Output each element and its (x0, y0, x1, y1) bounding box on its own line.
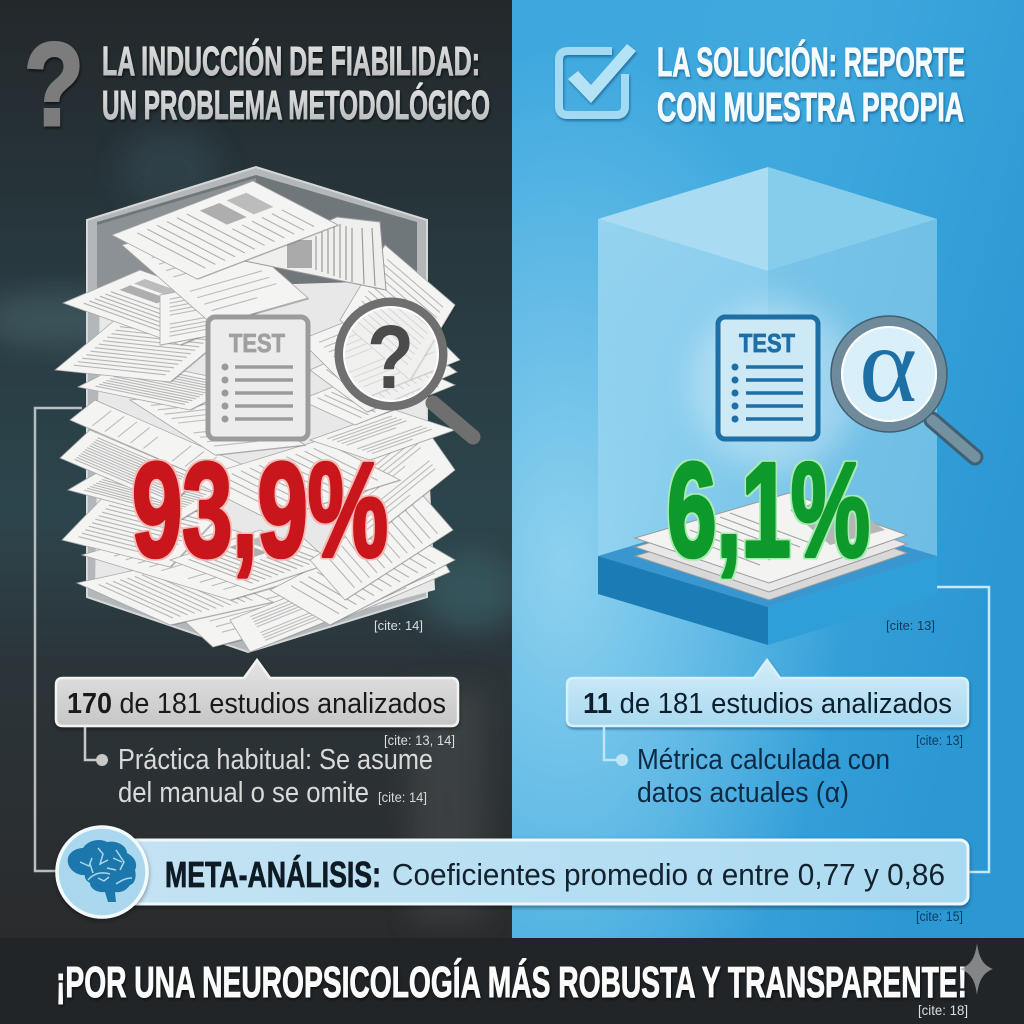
icon: magnifier with question mark (339, 302, 473, 437)
icon: magnifier with alpha: α (859, 306, 917, 425)
text: calculated metric: Métrica calculada con (637, 744, 890, 776)
heading: left problem header (24, 19, 490, 151)
cite: left stat: [cite: 14] (374, 618, 423, 633)
blue base (598, 505, 937, 645)
illustration: overflowing box of papers (55, 167, 473, 652)
cite: right stat: [cite: 13] (886, 618, 935, 633)
cite: left callout: [cite: 13, 14] (384, 732, 455, 748)
stat: 6,1%: 6,1% (667, 436, 870, 585)
title: left (102, 38, 490, 128)
text: calculated metric: datos actuales (α) (637, 777, 849, 809)
text: common practice: [cite: 14] (378, 789, 427, 805)
connector: left to meta-analysis (35, 408, 82, 871)
callout: 170 of 181 studies (56, 660, 458, 726)
callout: 11 of 181 studies: 11 de 181 estudios analizados (583, 688, 952, 720)
text: common practice: del manual o se omite (118, 777, 369, 809)
callout: 170 of 181 studies: 170 de 181 estudios analizados (67, 688, 446, 720)
icon: grey test sheet (208, 317, 308, 439)
connector: right to meta-analysis (937, 587, 989, 872)
icon: magnifier with question mark: ? (367, 308, 414, 408)
heading: right solution header (559, 39, 965, 130)
icon: grey test sheet: TEST (229, 328, 285, 358)
cite: meta-analysis: [cite: 15] (916, 908, 963, 924)
icon: checkbox (559, 44, 636, 115)
icon: question mark: ? (24, 19, 84, 151)
panel: left dark background (0, 0, 520, 940)
banner: meta-analysis (57, 827, 968, 917)
cite: right callout: [cite: 13] (916, 732, 963, 748)
title: left: UN PROBLEMA METODOLÓGICO (102, 82, 490, 128)
icon: sparkle (960, 943, 993, 995)
connector: left bullet (85, 727, 108, 766)
glass walls (598, 167, 937, 607)
text: coefficient range: Coeficientes promedio α entre 0,77 y 0,86 (392, 857, 945, 892)
panel: right blue background (512, 0, 1024, 940)
title: right (657, 39, 965, 130)
thin paper stack (635, 493, 907, 600)
icon: blue test sheet: TEST (739, 328, 795, 358)
stat: 93,9%: 93,9% (132, 436, 388, 585)
cite: footer: [cite: 18] (918, 1002, 968, 1018)
text: meta-analysis label: META-ANÁLISIS: (165, 854, 381, 895)
connector: right bullet (604, 727, 628, 766)
icon: brain (57, 827, 147, 917)
icon: blue test sheet (718, 317, 818, 439)
text: common practice: Práctica habitual: Se asume (118, 744, 433, 776)
box (87, 167, 427, 652)
illustration: transparent glass box (598, 167, 975, 645)
paper stack (55, 181, 461, 652)
icon: magnifier with alpha (831, 306, 975, 457)
footer band (0, 938, 1024, 1024)
text: common practice (118, 744, 433, 809)
callout: 11 of 181 studies (567, 660, 968, 726)
text: calculated metric (637, 744, 890, 809)
title: left: LA INDUCCIÓN DE FIABILIDAD: (102, 38, 480, 84)
